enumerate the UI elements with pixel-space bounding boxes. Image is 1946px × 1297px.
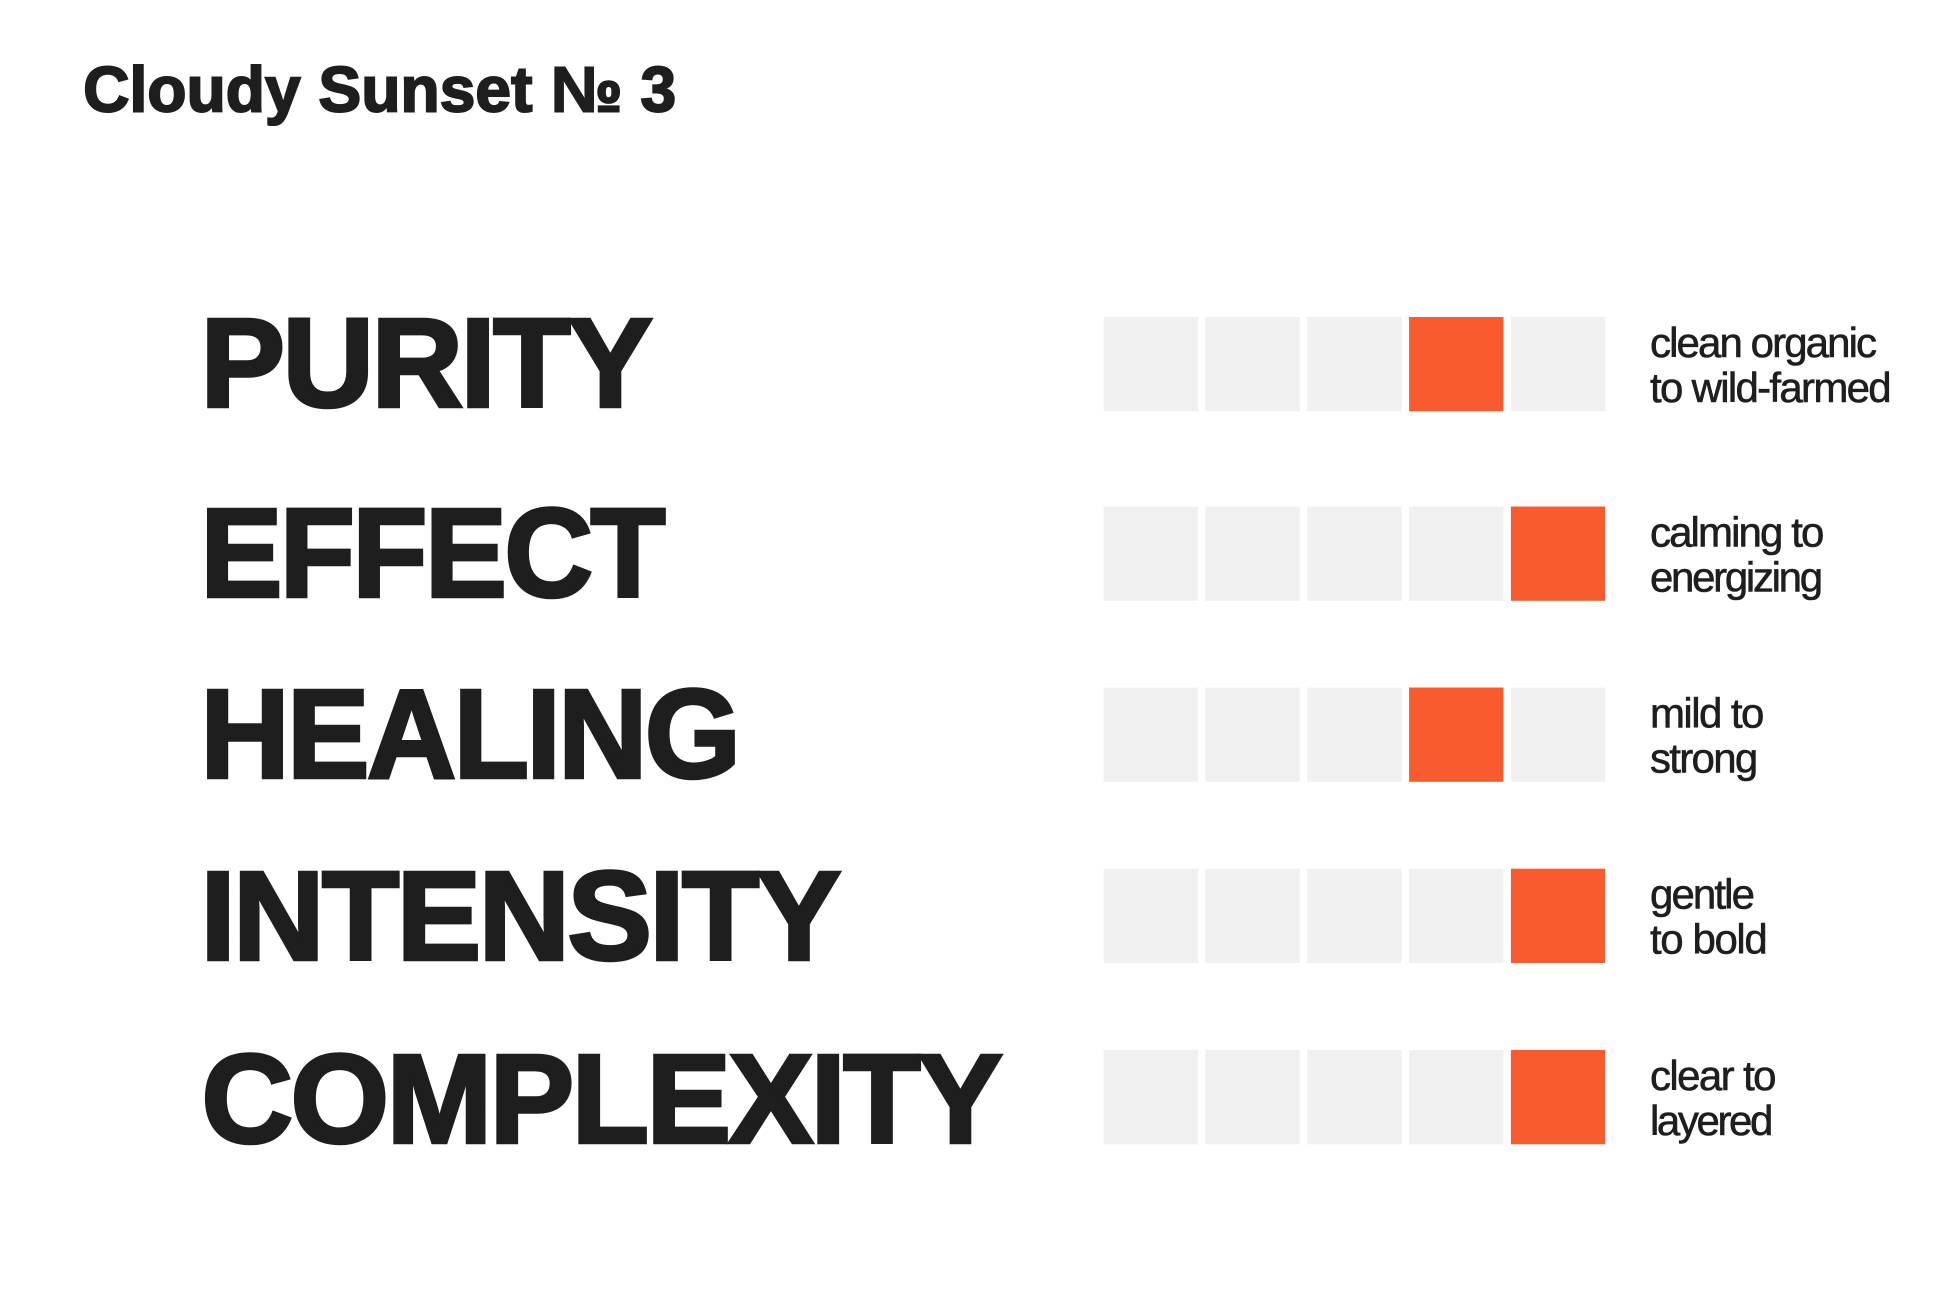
description: purity: to wild-farmed: [1650, 364, 1890, 411]
description: effect: [1650, 508, 1823, 600]
heading: effect: EFFECT: [200, 483, 665, 624]
row: complexity: [202, 1029, 1775, 1169]
scale: purity, 4 of 5: [1104, 317, 1605, 411]
scale: healing, 4 of 5: [1104, 688, 1605, 782]
title: №: [551, 54, 620, 126]
description: intensity: [1650, 871, 1766, 963]
row: effect: [200, 483, 1823, 624]
description: complexity: clear to: [1650, 1052, 1775, 1099]
description: effect: energizing: [1650, 554, 1821, 600]
description: purity: clean organic: [1650, 319, 1876, 366]
description: complexity: layered: [1650, 1097, 1771, 1144]
description: intensity: to bold: [1650, 916, 1766, 963]
description: effect: calming to: [1650, 508, 1823, 556]
heading: intensity: INTENSITY: [200, 846, 840, 986]
heading: purity: PURITY: [200, 293, 651, 433]
heading: healing: HEALING: [200, 664, 738, 805]
description: complexity: [1650, 1052, 1775, 1144]
row: purity: [200, 293, 1890, 433]
description: purity: [1650, 319, 1890, 411]
heading: complexity: COMPLEXITY: [202, 1029, 1001, 1169]
description: healing: strong: [1650, 734, 1757, 782]
row: healing: [200, 664, 1763, 805]
description: healing: mild to: [1650, 690, 1763, 736]
scale: intensity, 5 of 5: [1104, 869, 1605, 963]
row: intensity: [200, 846, 1766, 986]
description: healing: [1650, 690, 1763, 782]
title: Cloudy Sunset: [83, 54, 533, 126]
description: intensity: gentle: [1650, 871, 1754, 918]
scale: effect, 5 of 5: [1104, 506, 1605, 601]
scale: complexity, 5 of 5: [1104, 1050, 1605, 1144]
title: 3: [640, 54, 676, 126]
